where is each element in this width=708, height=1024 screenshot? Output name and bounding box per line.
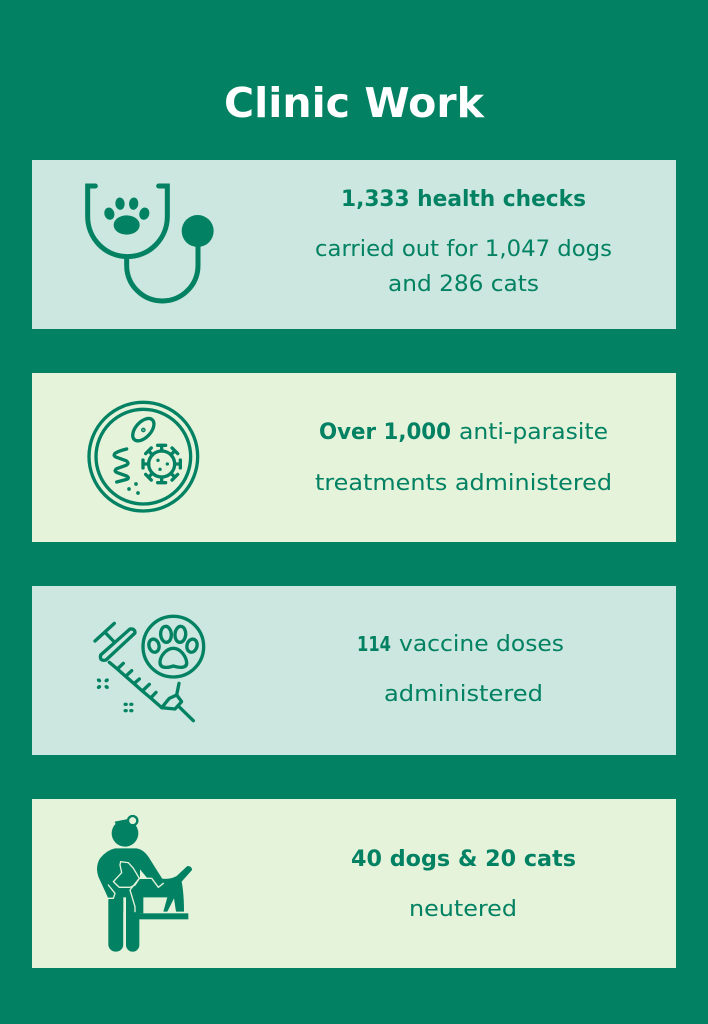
panel: vaccine doses [32, 586, 676, 755]
title: Clinic Work [224, 79, 486, 127]
text: health checks detail line 2: and 286 cats [388, 272, 539, 297]
text: health checks heading: 1,333 health checks [341, 187, 586, 212]
text: vaccine line 2: administered [384, 682, 543, 707]
text: vaccine line 1: vaccine doses [399, 632, 564, 657]
text: anti-parasite bold amount: Over 1,000 [319, 420, 451, 445]
text: health checks detail line 1: carried out for 1,047 dogs [315, 237, 612, 262]
panel: health checks [32, 160, 676, 329]
text: vaccine bold amount: 114 [357, 632, 391, 656]
text: neutering heading: 40 dogs & 20 cats [351, 847, 576, 872]
text: anti-parasite line 2: treatments administered [315, 471, 612, 496]
panel: neutering [32, 799, 676, 968]
icon: vet holding dog on a table [97, 816, 192, 952]
icon: petri dish with microbes [89, 402, 198, 511]
panel: anti-parasite treatments [32, 373, 676, 542]
text: anti-parasite line 1: anti-parasite [459, 420, 608, 445]
text: neutering detail: neutered [409, 897, 517, 922]
icon: stethoscope with paw [88, 186, 214, 301]
icon: syringe and paw [95, 616, 204, 721]
